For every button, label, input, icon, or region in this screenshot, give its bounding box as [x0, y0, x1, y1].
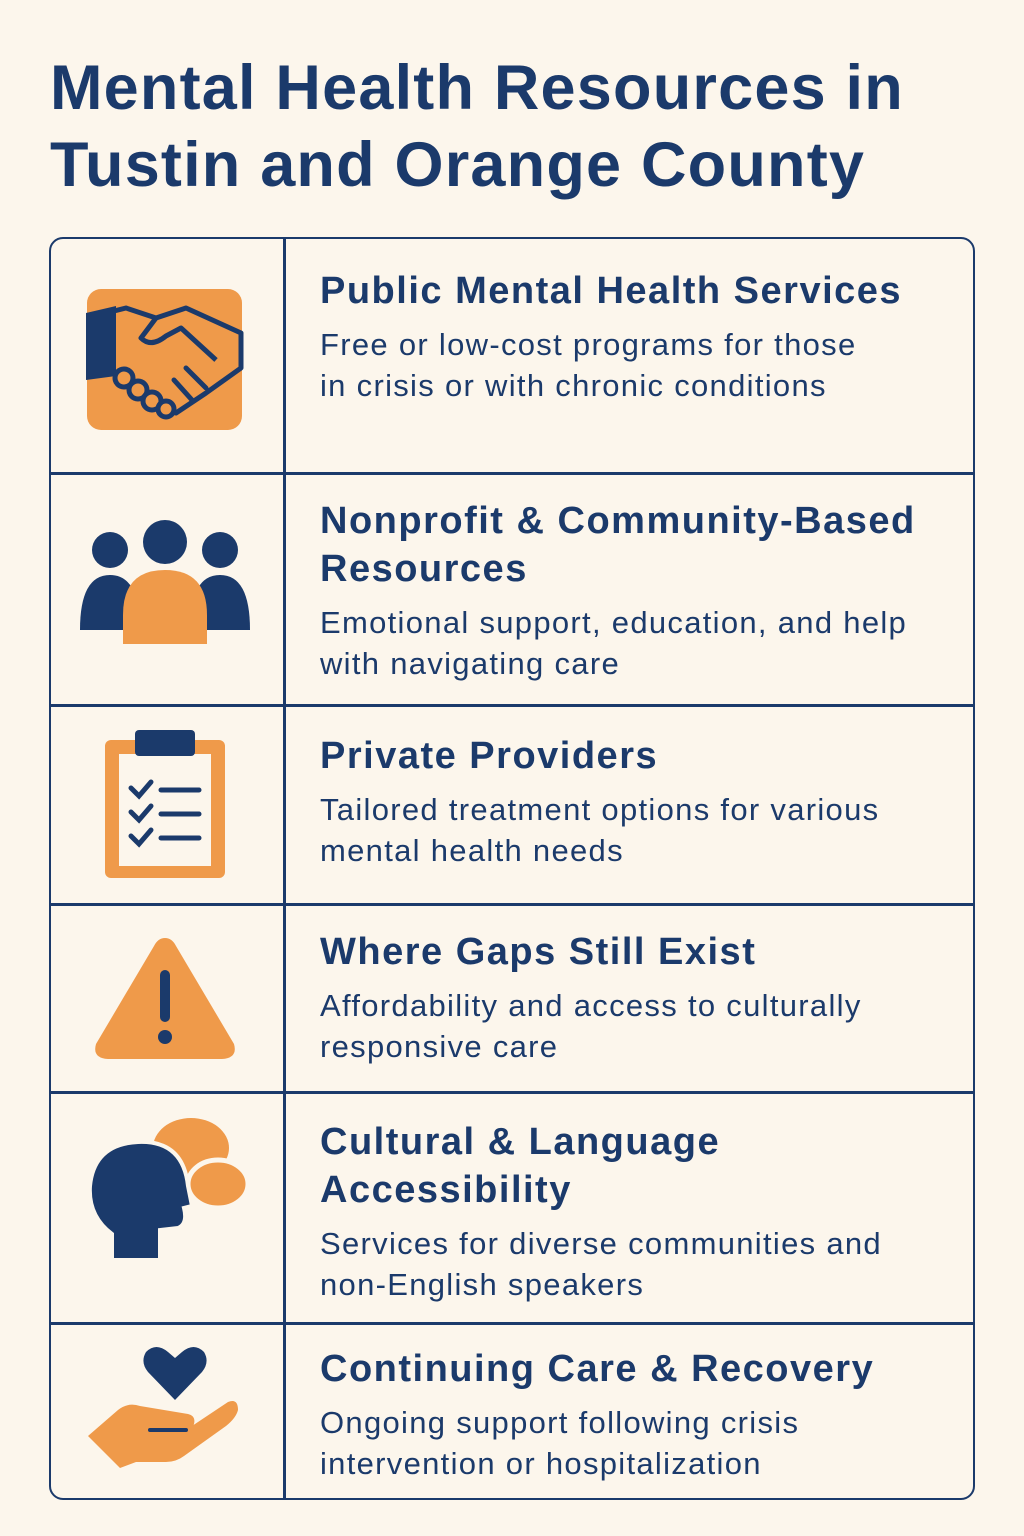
text: public: Public Mental Health Services — [320, 270, 902, 312]
text: private — [320, 735, 879, 868]
icon: warning — [95, 938, 235, 1059]
icon: heart in hand — [88, 1347, 238, 1468]
text: nonprofit: Nonprofit & Community-Based — [320, 500, 916, 542]
text: cultural: Accessibility — [320, 1169, 572, 1211]
text: private: Tailored treatment options for various — [320, 792, 879, 827]
text: nonprofit: Resources — [320, 548, 528, 590]
text: cultural: non-English speakers — [320, 1267, 644, 1302]
text: public: in crisis or with chronic conditions — [320, 368, 827, 403]
text: cultural: Cultural & Language — [320, 1121, 720, 1163]
text: nonprofit — [320, 500, 916, 681]
text: continuing: intervention or hospitalization — [320, 1446, 762, 1481]
text: public: Free or low-cost programs for those — [320, 327, 857, 362]
text: private: Private Providers — [320, 735, 658, 777]
text: gaps: Affordability and access to culturally — [320, 988, 862, 1023]
text: continuing: Continuing Care & Recovery — [320, 1348, 874, 1390]
text: nonprofit: with navigating care — [320, 646, 620, 681]
text: gaps: responsive care — [320, 1029, 558, 1064]
text: nonprofit: Emotional support, education, and help — [320, 605, 907, 640]
text: gaps: Where Gaps Still Exist — [320, 931, 756, 973]
text: public — [320, 270, 902, 403]
icon: handshake — [86, 289, 244, 430]
title — [50, 53, 904, 200]
text: continuing — [320, 1348, 874, 1481]
text: cultural — [320, 1121, 882, 1302]
text: continuing: Ongoing support following crisis — [320, 1405, 799, 1440]
title: Mental Health Resources in — [50, 53, 904, 123]
icon: people — [80, 520, 250, 644]
text: private: mental health needs — [320, 833, 624, 868]
icon: clipboard — [105, 730, 225, 878]
icon: head with speech bubbles — [92, 1118, 246, 1258]
title: Tustin and Orange County — [50, 130, 865, 200]
table panel — [49, 237, 975, 1500]
text: cultural: Services for diverse communities and — [320, 1226, 882, 1261]
text: gaps — [320, 931, 862, 1064]
